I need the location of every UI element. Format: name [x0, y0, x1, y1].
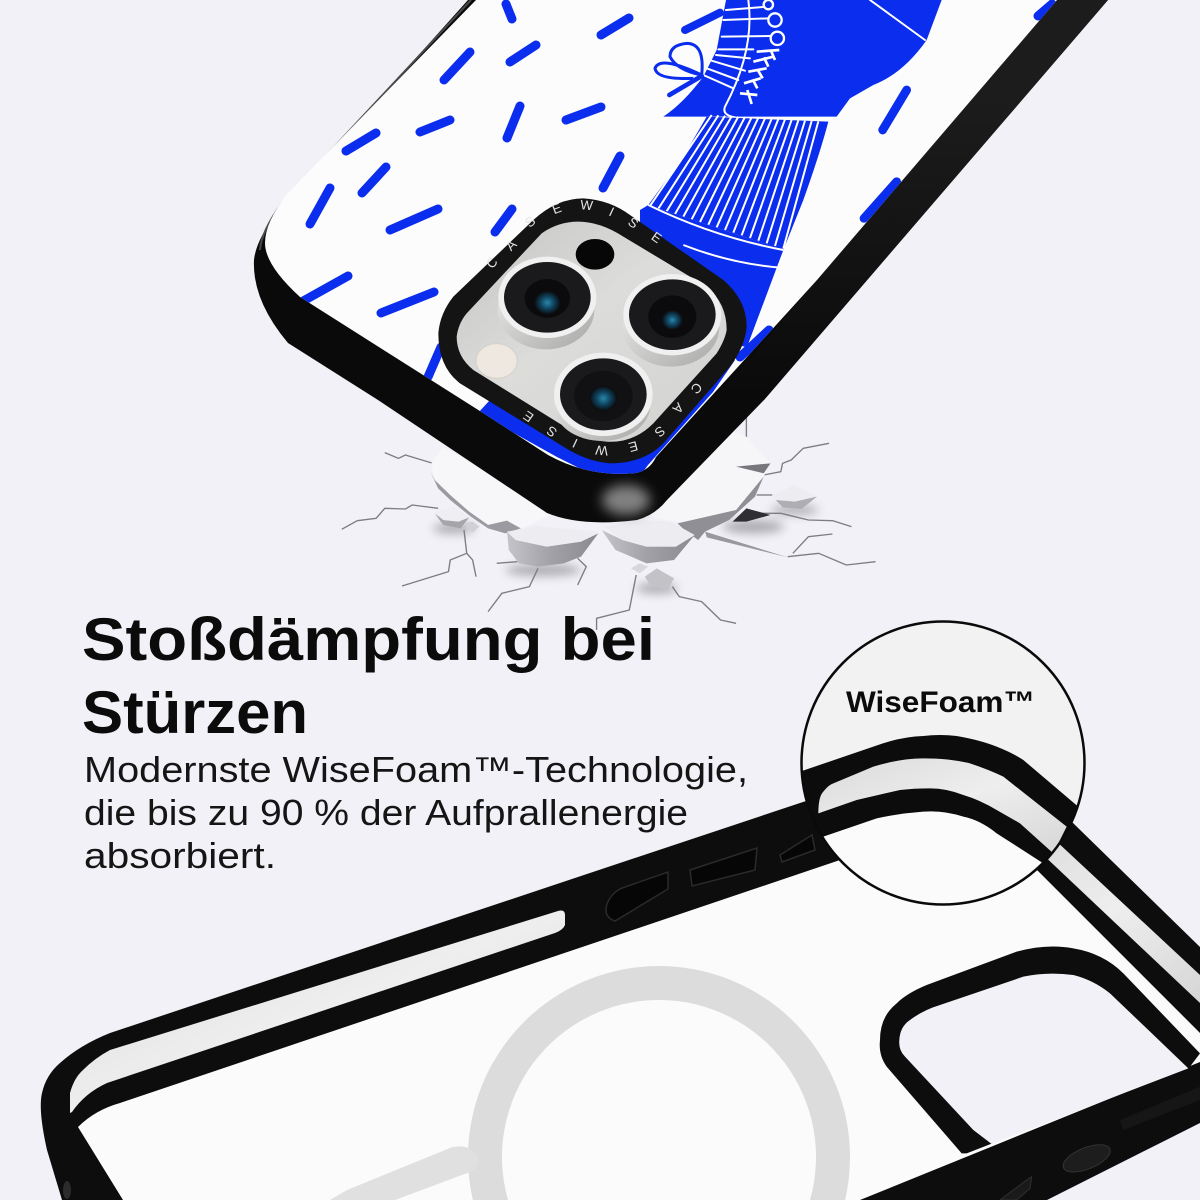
band white lines: [648, 205, 783, 268]
body text: [84, 749, 748, 876]
ring lettering: E: [550, 200, 564, 217]
magnified detail circle: [790, 622, 1090, 910]
circle fill: [802, 622, 1084, 904]
bow: [655, 43, 702, 95]
ring lettering: S: [625, 214, 641, 232]
ring lettering: C: [483, 254, 501, 271]
ring lettering: I: [607, 204, 616, 219]
circle label: WiseFoam™: [846, 686, 1035, 719]
ring lettering: W: [594, 442, 609, 459]
striped sleeve: [648, 117, 828, 250]
crack lines: [342, 417, 876, 630]
frame black edges: [803, 735, 1077, 862]
ring lettering: I: [570, 436, 580, 451]
dome lace marks: [740, 50, 779, 104]
right rock: [772, 485, 817, 508]
body text: die bis zu 90 % der Aufprallenergie: [84, 792, 688, 833]
ring lettering: S: [652, 423, 668, 440]
ring lettering: E: [649, 229, 665, 246]
speaker slot: [1000, 1177, 1032, 1200]
camera plate: [457, 222, 727, 442]
dash near figure: [685, 13, 720, 30]
blue dashes: [296, 4, 1052, 377]
bottom rocks: [631, 563, 648, 573]
lens 2: [623, 274, 721, 367]
bottom phone case, inside view: [41, 756, 1200, 1200]
right frame sheen: [714, 0, 1108, 400]
ring lettering: W: [580, 197, 594, 213]
sleeve lower band: [640, 205, 783, 347]
heading: Stoßdämpfung bei: [82, 606, 655, 673]
ground shadows: [433, 505, 819, 594]
corner highlight: [602, 485, 650, 515]
figure artwork: [640, 0, 942, 347]
flash: [476, 344, 517, 378]
dome pins: [764, 0, 784, 45]
top phone case: [240, 0, 1108, 522]
dash right of sleeve: [864, 182, 897, 218]
MagSafe ring: [468, 966, 850, 1200]
port: [1059, 1139, 1114, 1178]
circle outline: [802, 622, 1084, 904]
ring lettering: A: [670, 400, 687, 417]
body text: Modernste WiseFoam™-Technologie,: [84, 749, 748, 790]
lens 3: [554, 353, 653, 441]
cutout black ring: [880, 946, 1200, 1153]
MagSafe alignment pill: [330, 1146, 478, 1200]
heading: Stürzen: [82, 679, 308, 746]
ring lettering: S: [522, 213, 538, 230]
printed back panel: [265, 0, 1057, 474]
ring body: [438, 198, 747, 463]
center-left rock: [507, 532, 598, 567]
left slab: [431, 447, 554, 528]
ring lettering: E: [627, 438, 640, 455]
center-right rock: [602, 530, 695, 563]
heading: [82, 606, 655, 746]
magnified frame: [803, 735, 1077, 903]
body text: absorbiert.: [84, 835, 276, 876]
foam channel: [818, 758, 1067, 853]
camera module: [438, 197, 747, 463]
ring lettering: E: [520, 408, 536, 425]
ring lettering: A: [503, 237, 520, 254]
case frame: [254, 0, 1108, 522]
ring lettering: S: [544, 423, 560, 440]
dome inner lines: [703, 0, 925, 117]
left channel: [70, 910, 565, 1113]
ring lettering: C: [688, 380, 705, 397]
black frame: [41, 756, 1200, 1200]
magnified clear panel: [824, 811, 1042, 904]
blue band under camera: [478, 360, 735, 477]
left frame port: [63, 1181, 71, 1199]
small left rock: [435, 513, 469, 528]
blue figure dome: [663, 0, 942, 117]
lens 1: [498, 257, 596, 349]
cracked ground illustration: [342, 417, 876, 630]
dash right of dome: [883, 90, 907, 130]
right slab: [650, 427, 770, 523]
clear back panel: [78, 836, 1200, 1200]
cutout opening: [899, 974, 1188, 1144]
white panel: [265, 0, 1057, 474]
right channel: [1020, 826, 1200, 1003]
frame rim highlight: [260, 0, 471, 250]
camera cutout: [880, 946, 1200, 1200]
sleeve stripes: [650, 115, 818, 249]
ring lettering: [483, 197, 705, 459]
microphone hole: [576, 239, 614, 270]
lower edge sheen: [1120, 1087, 1200, 1130]
side buttons: [606, 835, 815, 921]
